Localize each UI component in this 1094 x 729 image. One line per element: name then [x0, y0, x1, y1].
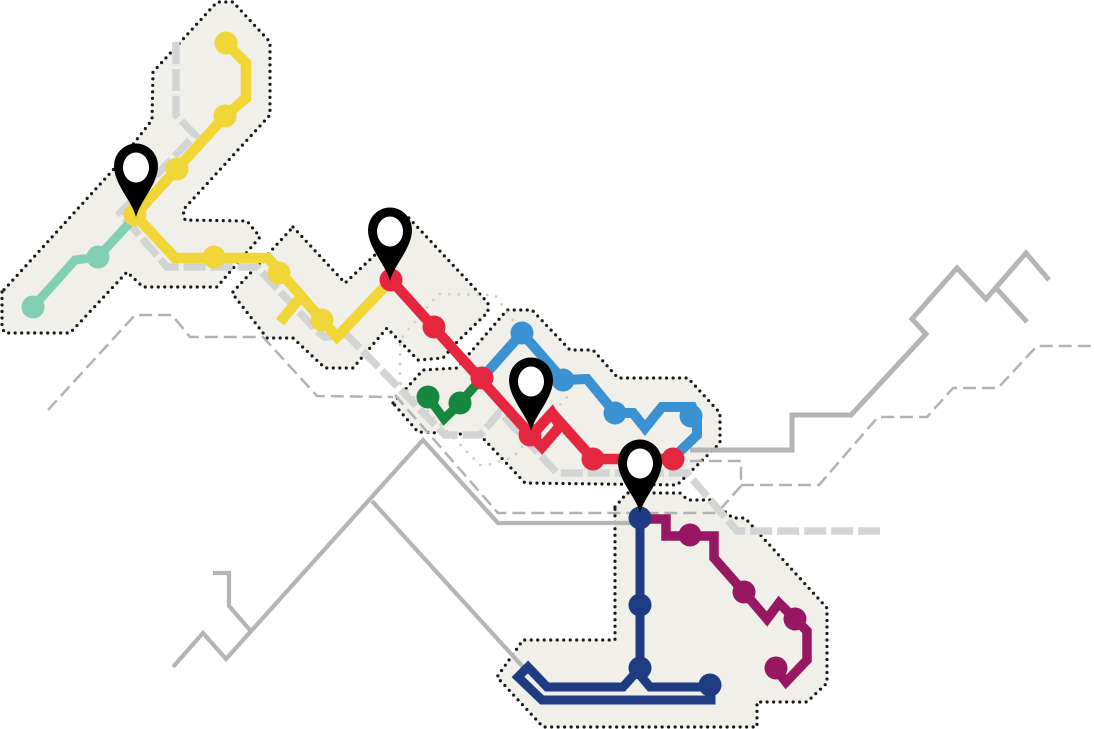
zone: south service area — [497, 493, 827, 727]
icon: map pin south — [618, 440, 662, 513]
route: purple line — [645, 519, 807, 682]
route: red line — [380, 268, 684, 470]
zone: river service area — [393, 310, 720, 485]
line: thick light dashed track — [120, 42, 880, 531]
line: thin dashed east route — [741, 346, 1093, 485]
route: blue line — [482, 322, 702, 458]
route: navy line — [518, 506, 722, 700]
line: dotted grey loop — [400, 294, 567, 465]
icon: map pin northwest — [114, 144, 158, 217]
zone: central service area — [232, 217, 488, 368]
line: southwest grey route — [173, 440, 640, 667]
line: northeast grey route — [690, 253, 1049, 450]
line: thin dashed west route — [48, 315, 393, 410]
icon: map pin central — [368, 208, 412, 281]
line: thin dashed central route — [395, 395, 741, 513]
route: green line — [416, 378, 482, 419]
zone: northwest service area — [2, 2, 270, 333]
icon: map pin river — [509, 358, 553, 431]
route: yellow line — [124, 32, 391, 337]
route: mint line — [22, 217, 135, 318]
